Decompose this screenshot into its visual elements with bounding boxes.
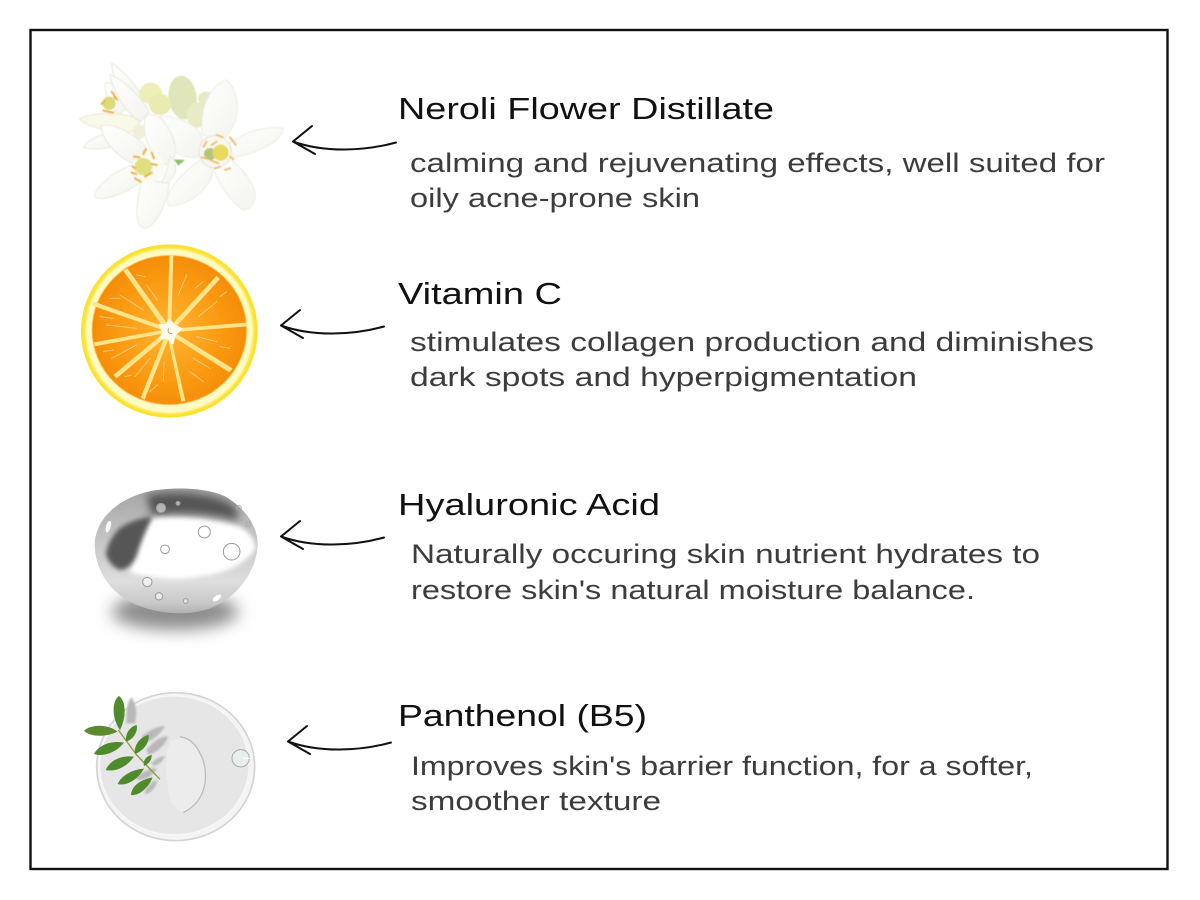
text: vitamin c: dark spots and hyperpigmentation xyxy=(410,362,917,392)
back flower top petals xyxy=(110,63,149,122)
bubbles xyxy=(118,501,251,603)
arrow: vitamin c xyxy=(281,310,384,338)
arrow: hyaluronic acid xyxy=(281,521,384,549)
bright inner area xyxy=(130,517,255,579)
text: panthenol: smoother texture xyxy=(411,786,661,816)
text: panthenol: Improves skin's barrier function, for a softer, xyxy=(411,751,1033,781)
text: neroli xyxy=(398,91,1105,213)
text: hyaluronic acid: Naturally occuring skin nutrient hydrates to xyxy=(411,539,1040,569)
text: vitamin c: Vitamin C xyxy=(398,276,562,311)
stem xyxy=(174,159,185,166)
text: vitamin c xyxy=(398,276,1094,392)
serum fill xyxy=(100,696,249,835)
text: hyaluronic acid: restore skin's natural moisture balance. xyxy=(411,575,975,605)
text: neroli: calming and rejuvenating effects, well suited for xyxy=(410,148,1105,178)
right flower petals xyxy=(160,80,283,210)
buds xyxy=(133,74,214,139)
icon: water droplet xyxy=(95,489,258,630)
dark left patch xyxy=(106,517,153,570)
icon: petri dish with leaf xyxy=(84,693,255,841)
text: hyaluronic acid: Hyaluronic Acid xyxy=(398,487,660,522)
text: panthenol: Panthenol (B5) xyxy=(398,698,647,733)
text: panthenol xyxy=(398,698,1033,816)
core xyxy=(159,320,182,343)
left flower centre xyxy=(132,149,157,182)
dish xyxy=(97,693,255,841)
droplet body xyxy=(95,489,258,613)
cast shadow xyxy=(112,593,238,630)
right flower centre xyxy=(199,135,236,170)
leaves xyxy=(84,696,153,795)
droplet shading xyxy=(106,493,255,579)
arrow: panthenol xyxy=(288,726,391,754)
icon: orange slice xyxy=(81,244,258,418)
text: hyaluronic acid xyxy=(398,487,1040,605)
juice vesicle highlights xyxy=(100,275,230,392)
text: neroli: oily acne-prone skin xyxy=(410,183,700,213)
rind xyxy=(81,244,258,418)
text: vitamin c: stimulates collagen production and diminishes xyxy=(410,327,1094,357)
text: neroli: Neroli Flower Distillate xyxy=(398,91,774,126)
left flower petals xyxy=(95,115,176,228)
gel blob xyxy=(166,737,205,813)
back flower stamens xyxy=(102,92,117,113)
icon: neroli flower xyxy=(79,63,283,228)
arrow: neroli xyxy=(293,126,396,154)
segment membranes xyxy=(92,256,247,402)
back flower petals xyxy=(79,83,142,149)
dark top band xyxy=(147,493,238,520)
highlights xyxy=(105,520,222,603)
bubble xyxy=(232,750,252,767)
leaf shadows xyxy=(126,697,168,794)
pith xyxy=(85,249,253,413)
stem xyxy=(118,730,160,779)
flesh xyxy=(92,255,247,405)
